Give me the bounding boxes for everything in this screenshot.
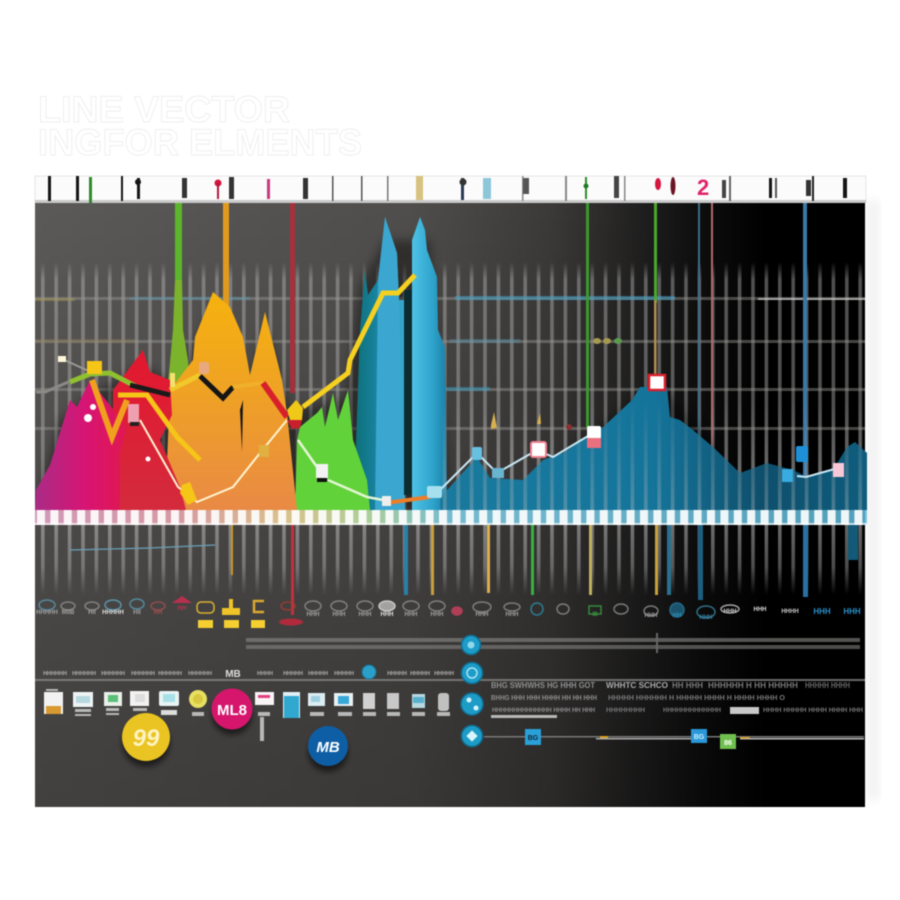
label row: HHHH <box>257 671 273 677</box>
icon row labels: HHH <box>404 612 418 618</box>
mountain: red range <box>112 350 186 510</box>
body text block: WHHTC SCHCO <box>606 681 668 690</box>
icon row labels: HH <box>154 610 162 616</box>
chart panel background <box>35 203 865 807</box>
chart data points: white dots <box>84 404 150 462</box>
row markers <box>35 296 865 391</box>
label row: MB <box>225 669 241 680</box>
top ruler strip <box>35 175 866 204</box>
coloured vertical lines upper <box>175 203 807 510</box>
icon row labels: HH <box>178 606 186 612</box>
label row: HHHHH <box>410 671 430 677</box>
dark gap details <box>240 400 243 452</box>
icon row labels: MIIB <box>62 610 75 616</box>
icon row labels <box>36 606 861 621</box>
cards row <box>44 689 450 741</box>
body text block: HHHHHH H HH HHHHH <box>708 681 798 690</box>
divider line <box>35 679 865 681</box>
icon row labels: HHH <box>430 612 444 618</box>
label row: HHHHH <box>434 671 454 677</box>
title: LINE VECTOR <box>38 89 290 130</box>
line: green and white <box>298 440 383 500</box>
label row <box>43 669 454 680</box>
line: green and grey <box>36 358 137 392</box>
mountain: blue range <box>440 387 867 510</box>
icon row labels: HHH <box>843 607 861 616</box>
body text block: HHHHHHHHHHHHH <box>663 708 721 714</box>
icon row labels: HHH <box>306 612 320 618</box>
icon row labels: HHHHH <box>102 610 124 616</box>
badge: blue <box>308 726 348 772</box>
body text block: HHHHH HHHHHH H HHHHH HHHH H HHHH HHHH O <box>608 695 786 702</box>
body text block: HHHH HHHHH HHHH HHHH HHH <box>763 708 863 714</box>
page shadow <box>866 200 880 800</box>
body text block: BHG SWHWHS HG HHH GOT <box>491 681 595 690</box>
label row: HHHHH <box>308 671 328 677</box>
icon row labels: HHH <box>476 612 488 618</box>
timeline line and boxes: 86 <box>724 740 732 747</box>
body text block: HHHHHHHH <box>606 708 645 714</box>
icon row labels: HHHH <box>781 609 799 615</box>
small teal dot <box>362 665 376 679</box>
top ruler strip: 2 <box>697 175 709 200</box>
body text block: HHHHH HHHH <box>805 681 850 690</box>
badge: magenta <box>212 688 252 735</box>
label row: HHHHH <box>387 671 407 677</box>
icon row labels: HHH <box>700 615 712 621</box>
badge: blue: MB <box>316 739 340 756</box>
line: orange and yellow zigzag <box>92 380 200 460</box>
mountain: magenta range <box>35 380 127 510</box>
line: main yellow rising line <box>130 275 415 417</box>
label row: HHHHHH <box>131 671 155 677</box>
label row: HHHHHH <box>158 671 182 677</box>
teal timeline nodes <box>461 636 483 746</box>
icon row labels: HHH <box>754 607 766 613</box>
title: INGFOR ELMENTS <box>38 122 362 163</box>
label row: HHHHH <box>334 671 354 677</box>
icon row labels: HHH <box>506 612 518 618</box>
icon row labels: HHH <box>332 612 346 618</box>
line: blue line <box>438 433 838 492</box>
timeline line and boxes: BG <box>528 735 539 742</box>
timeline line and boxes: BG <box>694 734 705 741</box>
icon row labels: HHH <box>380 612 394 618</box>
body text block: HH HHH <box>672 681 703 690</box>
mountain shadows <box>35 240 720 510</box>
line: orange segment <box>386 497 430 503</box>
coloured vertical lines lower <box>70 525 858 615</box>
badge: magenta: ML8 <box>217 702 247 719</box>
title <box>38 89 362 163</box>
label row: HHHHHH <box>188 671 212 677</box>
badge: yellow: 99 <box>133 725 160 752</box>
grid columns upper <box>35 262 865 510</box>
progress bars <box>246 633 860 653</box>
label row: HHHHHH <box>72 671 96 677</box>
icon row labels: HHH <box>358 612 372 618</box>
icon row labels: HII <box>133 610 141 616</box>
label row: HHHHH <box>283 671 303 677</box>
mountain: green spike <box>166 280 190 395</box>
badge: yellow <box>122 713 170 767</box>
timeline line and boxes <box>484 729 864 749</box>
body text block: HHHHHHHHHHHHHH HHHH HH HHH <box>492 708 595 714</box>
light streaks over blue range <box>442 416 862 510</box>
icon row labels: III <box>592 612 598 618</box>
icon row glyph outlines <box>39 599 739 618</box>
icon row labels: HII <box>88 610 96 616</box>
line: pale connecting line <box>140 420 287 502</box>
icon row labels: HH <box>673 613 681 619</box>
icon row labels: HHH <box>813 607 831 616</box>
markers <box>58 356 844 506</box>
label row: HHHHHH <box>101 671 125 677</box>
body text block: BHHG HHH HHH HHHH HH HH HHH <box>491 695 597 702</box>
tick strip <box>35 510 867 525</box>
mountain: teal and blue towers <box>350 217 447 510</box>
mountain: green range <box>295 390 370 510</box>
icon row labels: HHHHH <box>36 610 58 616</box>
body text block <box>491 681 863 718</box>
grid rows <box>35 297 865 430</box>
label row: HHHHHH <box>43 671 67 677</box>
yellow icons <box>172 596 303 628</box>
icon row labels: HHH <box>724 609 736 615</box>
grid columns lower <box>35 525 865 595</box>
mountain: orange range <box>165 292 297 510</box>
icon row labels: HHH <box>644 613 658 619</box>
